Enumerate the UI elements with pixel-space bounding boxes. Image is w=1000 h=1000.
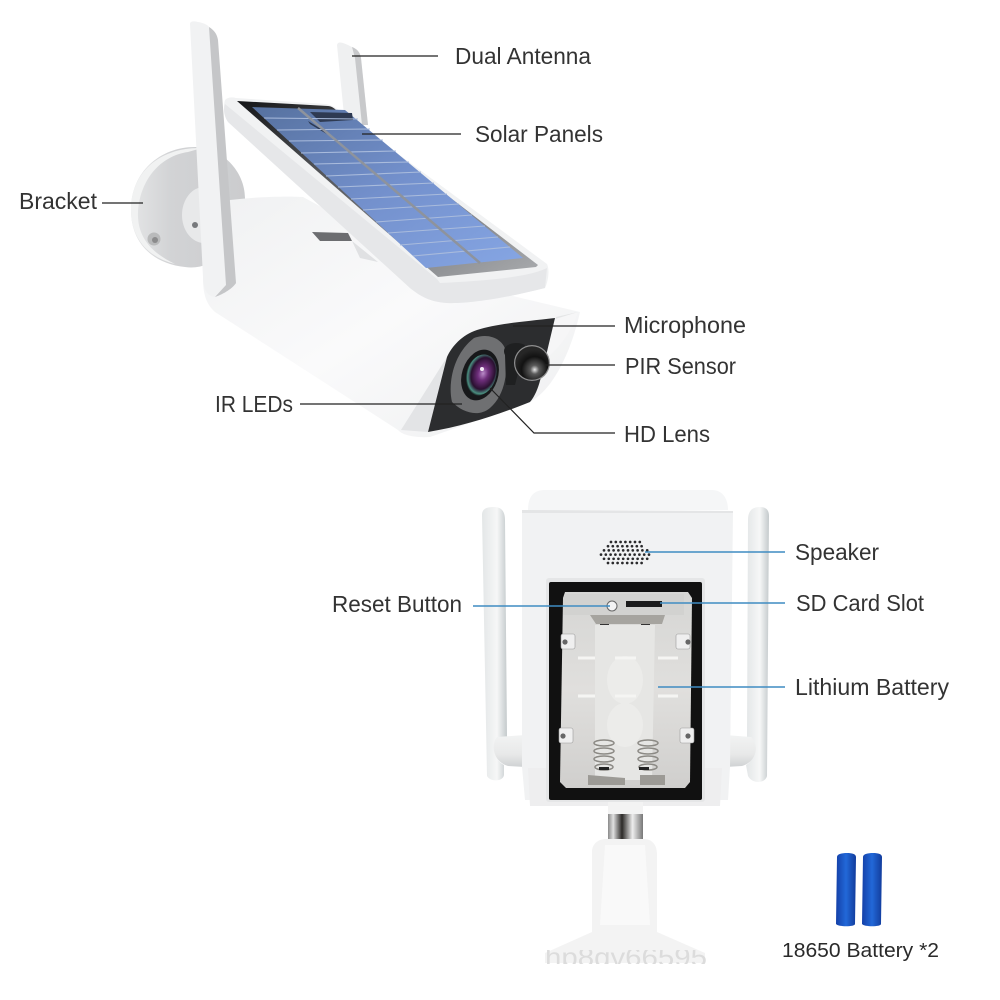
wall bracket xyxy=(131,147,245,268)
mount stem xyxy=(608,802,643,841)
left antenna xyxy=(482,507,525,780)
callout: HD lens: HD Lens xyxy=(624,421,710,447)
front antenna xyxy=(190,21,236,297)
solar panel xyxy=(224,97,548,303)
springs xyxy=(594,740,658,770)
battery 2 xyxy=(862,853,882,926)
mount base xyxy=(545,839,707,972)
screws xyxy=(559,634,694,743)
reset and SD strip xyxy=(563,594,684,615)
callout: SD card slot: SD Card Slot xyxy=(796,590,925,616)
panel frame xyxy=(224,97,548,303)
callout: dual antenna: Dual Antenna xyxy=(455,43,591,69)
camera body xyxy=(203,197,580,437)
battery caption: 18650 Battery *2 xyxy=(782,940,939,962)
lens surround xyxy=(451,336,507,413)
PIR sensor xyxy=(514,345,550,381)
panel glass xyxy=(237,101,538,277)
rear antenna xyxy=(337,43,368,125)
centre ribs xyxy=(595,625,655,780)
reset button xyxy=(607,601,617,611)
speaker grille xyxy=(601,542,652,563)
callout: reset button: Reset Button xyxy=(332,591,462,617)
callout: bracket: Bracket xyxy=(19,188,98,214)
callout: bracket xyxy=(19,188,143,214)
watermark remnant: hp8qv66595 xyxy=(545,942,707,972)
callout: IR LEDs: IR LEDs xyxy=(215,391,293,417)
battery compartment xyxy=(546,578,705,802)
solar cells xyxy=(252,107,523,268)
front face xyxy=(428,318,555,432)
HD lens xyxy=(455,345,505,405)
camera front view xyxy=(131,21,580,437)
callout: HD lens xyxy=(490,388,710,447)
18650 batteries xyxy=(836,853,882,926)
callout: microphone: Microphone xyxy=(624,312,746,338)
callout: PIR sensor: PIR Sensor xyxy=(625,353,736,379)
callout: solar panels: Solar Panels xyxy=(475,121,603,147)
right antenna xyxy=(725,507,769,782)
battery 1 xyxy=(836,853,856,926)
rear housing xyxy=(522,490,733,806)
callout: speaker: Speaker xyxy=(795,539,879,565)
camera rear view xyxy=(482,490,769,972)
callout: lithium battery: Lithium Battery xyxy=(795,674,949,700)
SD card slot xyxy=(626,601,662,607)
